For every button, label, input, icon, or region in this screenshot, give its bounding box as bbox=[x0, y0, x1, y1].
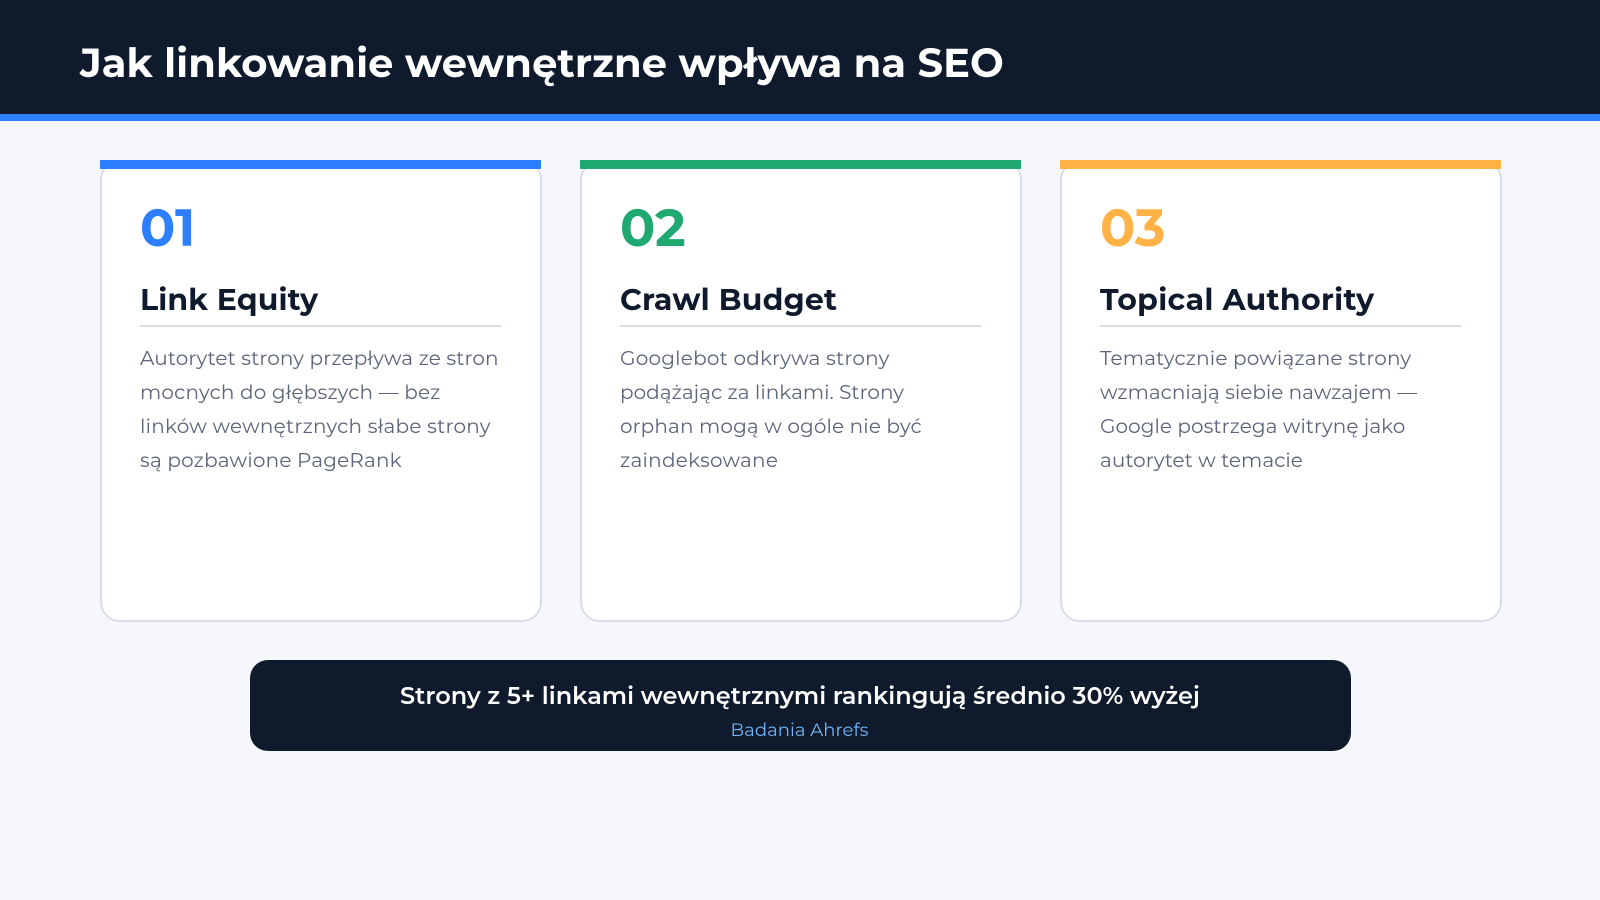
number 03: 03 bbox=[1100, 197, 1165, 260]
text: Topical Authority description: autorytet w temacie bbox=[1100, 449, 1303, 473]
text: Link Equity description: mocnych do głębszych — bez bbox=[140, 381, 441, 405]
callout headline: Strony z 5+ linkami wewnętrznymi rankingują średnio 30% wyżej bbox=[400, 682, 1200, 711]
heading: Link Equity: Link Equity bbox=[140, 281, 318, 318]
text: Crawl Budget description: Googlebot odkrywa strony bbox=[620, 347, 890, 371]
number 01: 01 bbox=[140, 197, 195, 260]
text: Topical Authority description: Tematycznie powiązane strony bbox=[1100, 347, 1411, 371]
text: Link Equity description bbox=[140, 347, 499, 473]
text: Topical Authority description: wzmacniają siebie nawzajem — bbox=[1100, 381, 1417, 405]
callout source: Badania Ahrefs bbox=[731, 719, 868, 741]
text: Crawl Budget description bbox=[620, 347, 922, 473]
panel: Link Equity bbox=[100, 160, 542, 622]
number 02: 02 bbox=[620, 197, 686, 260]
text: Topical Authority description: Google postrzega witrynę jako bbox=[1100, 415, 1405, 439]
callout bbox=[250, 660, 1351, 751]
text: Link Equity description: są pozbawione PageRank bbox=[140, 449, 402, 473]
heading: Topical Authority: Topical Authority bbox=[1100, 281, 1374, 318]
text: Crawl Budget description: zaindeksowane bbox=[620, 449, 778, 473]
panel: Topical Authority bbox=[1060, 160, 1502, 622]
header band bbox=[0, 0, 1600, 121]
text: Link Equity description: linków wewnętrznych słabe strony bbox=[140, 415, 491, 439]
text: Crawl Budget description: orphan mogą w ogóle nie być bbox=[620, 415, 922, 439]
text: Link Equity description: Autorytet strony przepływa ze stron bbox=[140, 347, 499, 371]
title: Jak linkowanie wewnętrzne wpływa na SEO bbox=[80, 39, 1004, 88]
text: Crawl Budget description: podążając za linkami. Strony bbox=[620, 381, 904, 405]
text: Topical Authority description bbox=[1100, 347, 1418, 473]
heading: Crawl Budget: Crawl Budget bbox=[620, 281, 837, 318]
panel: Crawl Budget bbox=[580, 160, 1022, 622]
